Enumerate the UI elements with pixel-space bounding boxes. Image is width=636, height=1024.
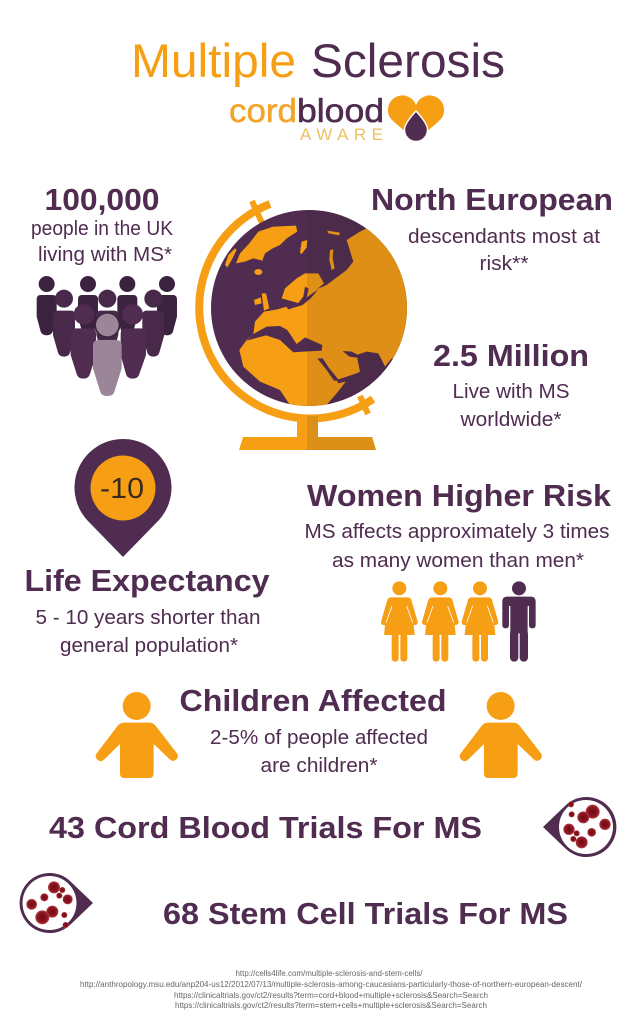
heading: cord blood trials: 43 Cord Blood Trials For MS	[49, 810, 482, 845]
logo: cord blood aware: AWARE	[300, 125, 383, 144]
stat: life expectancy: 5 - 10 years shorter than	[36, 606, 260, 629]
icon: child right	[460, 692, 542, 778]
sources	[80, 968, 583, 1010]
stat: 100,000 people in the UK: living with MS*	[38, 243, 172, 266]
icon: cells magnifier right	[543, 797, 616, 857]
stat: women higher risk: Women Higher Risk	[307, 478, 612, 513]
stat: children affected: Children Affected	[180, 683, 446, 718]
greenland	[236, 226, 297, 263]
stat: 2.5 million: Live with MS	[452, 380, 570, 403]
stat: 100,000 people in the UK	[31, 182, 173, 266]
stat: north european: descendants most at	[408, 225, 600, 248]
stat: women higher risk: MS affects approximately 3 times	[304, 520, 610, 543]
logo: cord blood aware	[229, 92, 444, 144]
stat: women higher risk	[304, 478, 612, 572]
stat: children affected	[180, 683, 446, 777]
icon: crowd of people	[37, 276, 177, 396]
icon: map pin with -10: -10	[100, 473, 144, 505]
stat: children affected: 2-5% of people affected	[210, 726, 428, 749]
sources: https://clinicaltrials.gov/ct2/results?term=stem+cells+multiple+sclerosis&Search=Search	[175, 1000, 487, 1010]
stat: life expectancy	[24, 563, 270, 657]
stand arc	[199, 204, 373, 418]
logo: cord blood aware: blood	[297, 92, 384, 129]
sources: http://cells4life.com/multiple-sclerosis-and-stem-cells/	[236, 968, 423, 978]
title	[131, 34, 505, 87]
stat: 100,000 people in the UK: 100,000	[44, 182, 160, 217]
stat: 100,000 people in the UK: people in the UK	[31, 217, 173, 240]
woman 2	[422, 581, 459, 662]
sources: https://clinicaltrials.gov/ct2/results?term=cord+blood+multiple+sclerosis&Search=Search	[174, 990, 488, 1000]
heading: stem cell trials: 68 Stem Cell Trials For MS	[163, 896, 568, 931]
sources: http://anthropology.msu.edu/anp204-us12/2012/07/13/multiple-sclerosis-among-caucasians-particularly-those-of-northern-european-descent/	[80, 979, 583, 989]
woman 1	[381, 581, 418, 662]
man	[502, 581, 536, 662]
title: Multiple	[131, 34, 296, 87]
stat: 2.5 million: 2.5 Million	[433, 338, 589, 373]
seas	[247, 326, 322, 352]
stat: life expectancy: Life Expectancy	[24, 563, 270, 598]
eurasia and africa	[239, 228, 407, 406]
icon: map pin with -10	[74, 439, 172, 557]
icon: three women and one man	[381, 581, 536, 662]
stat: 2.5 million	[433, 338, 589, 431]
icon: cells magnifier left	[20, 873, 93, 933]
title: Sclerosis	[311, 34, 505, 87]
stat: 2.5 million: worldwide*	[459, 408, 562, 431]
stat: north european: North European	[371, 182, 613, 217]
stat: children affected: are children*	[260, 754, 378, 777]
logo: cord blood aware: cord	[229, 92, 297, 129]
stat: life expectancy: general population*	[60, 634, 238, 657]
icon: globe on stand	[199, 200, 430, 450]
icon: child left	[96, 692, 178, 778]
woman 3	[462, 581, 498, 662]
stat: women higher risk: as many women than men*	[332, 549, 584, 572]
stat: north european: risk**	[480, 252, 529, 275]
stat: north european	[371, 182, 613, 275]
